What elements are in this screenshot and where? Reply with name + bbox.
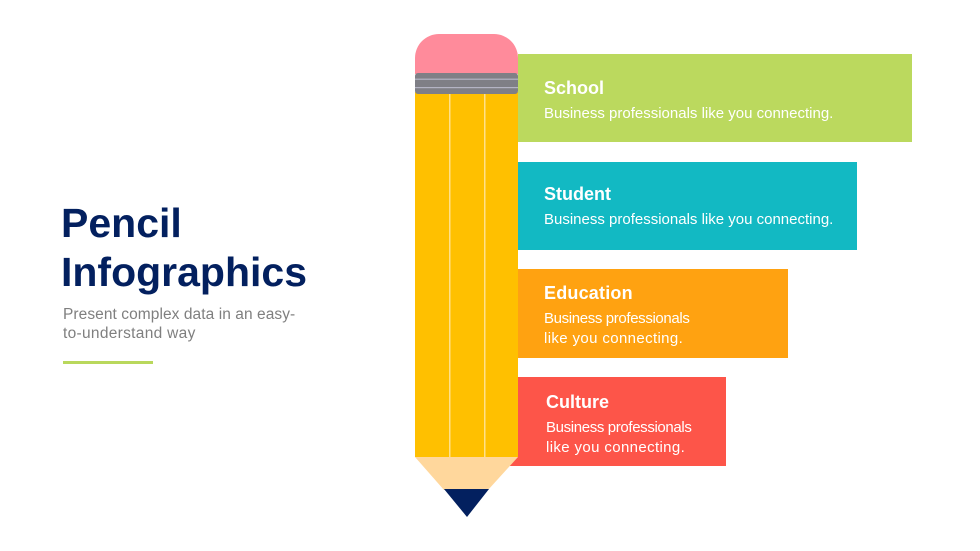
panel: school	[518, 54, 912, 142]
subtitle	[63, 306, 295, 342]
text: culture	[546, 419, 692, 456]
heading: culture: Culture	[546, 392, 609, 412]
text: culture: like you connecting.	[546, 438, 685, 456]
text: education: Business professionals	[544, 310, 690, 327]
panel: culture	[510, 377, 726, 466]
heading: student: Student	[544, 184, 611, 204]
accent underline	[63, 361, 153, 364]
icon: pencil	[415, 34, 518, 517]
panel: education	[518, 269, 788, 358]
text: culture: Business professionals	[546, 419, 692, 436]
text: student: Business professionals like you connecting.	[544, 211, 833, 228]
pencil ferrule	[415, 73, 518, 94]
text: education	[544, 310, 690, 346]
heading: school: School	[544, 78, 604, 98]
title: Infographics	[61, 249, 307, 295]
title	[61, 200, 307, 295]
pencil wood tip	[415, 457, 518, 490]
subtitle: Present complex data in an easy-	[63, 306, 295, 323]
text: school: Business professionals like you connecting.	[544, 105, 833, 122]
text: education: like you connecting.	[544, 330, 683, 346]
subtitle: to-understand way	[63, 324, 196, 342]
pencil body	[415, 92, 518, 457]
panel: student	[518, 162, 857, 250]
title: Pencil	[61, 200, 182, 246]
pencil eraser	[415, 34, 518, 74]
pencil lead	[444, 489, 489, 517]
heading: education: Education	[544, 283, 633, 303]
